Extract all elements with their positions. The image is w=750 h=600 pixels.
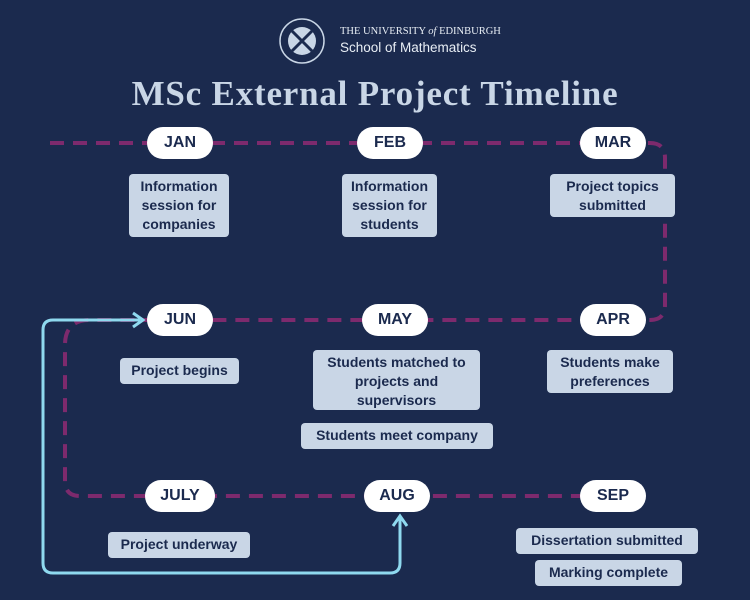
pill: FEB: FEB bbox=[374, 134, 406, 151]
box: MAY meet: Students meet company bbox=[316, 427, 478, 443]
box: MAY: projects and bbox=[355, 373, 438, 389]
pill: SEP bbox=[580, 480, 646, 512]
box: SEP dissertation: Dissertation submitted bbox=[531, 532, 683, 548]
box: SEP marking: Marking complete bbox=[549, 564, 668, 580]
pill: APR: APR bbox=[596, 311, 630, 328]
logo: THE UNIVERSITY of EDINBURGH bbox=[340, 26, 501, 37]
logo: School of Mathematics bbox=[340, 40, 477, 55]
pill: JAN bbox=[147, 127, 213, 159]
box: MAY bbox=[313, 350, 480, 410]
pill: JULY bbox=[145, 480, 215, 512]
pill: MAR bbox=[580, 127, 646, 159]
box: JUN bbox=[120, 358, 239, 384]
box: MAR: Project topics bbox=[566, 178, 659, 194]
logo bbox=[279, 18, 501, 64]
box: JAN: Information bbox=[140, 178, 218, 194]
box: JAN: companies bbox=[142, 216, 216, 232]
pill: JULY: JULY bbox=[160, 487, 200, 504]
pill: JAN: JAN bbox=[164, 134, 196, 151]
pill: FEB bbox=[357, 127, 423, 159]
pill: MAY bbox=[362, 304, 428, 336]
pill: MAR: MAR bbox=[595, 134, 631, 151]
pill: AUG bbox=[364, 480, 430, 512]
box: APR bbox=[547, 350, 673, 393]
box: SEP dissertation bbox=[516, 528, 698, 554]
arrow: cyan loop bbox=[43, 313, 407, 573]
box: JUN: Project begins bbox=[131, 362, 228, 378]
pill: AUG: AUG bbox=[379, 487, 415, 504]
box: MAY meet bbox=[301, 423, 493, 449]
box: MAY: Students matched to bbox=[327, 354, 466, 370]
box: APR: preferences bbox=[570, 373, 650, 389]
pill: JUN: JUN bbox=[164, 311, 196, 328]
box: FEB: Information bbox=[351, 178, 428, 194]
pill: MAY: MAY bbox=[378, 311, 412, 328]
box: FEB: students bbox=[360, 216, 419, 232]
box: MAR: submitted bbox=[579, 197, 646, 213]
box: MAR bbox=[550, 174, 675, 217]
box: FEB: session for bbox=[352, 197, 427, 213]
box: JAN bbox=[129, 174, 229, 237]
pill: JUN bbox=[147, 304, 213, 336]
box: MAY: supervisors bbox=[357, 392, 436, 408]
pill: SEP: SEP bbox=[597, 487, 629, 504]
box: FEB bbox=[342, 174, 437, 237]
box: APR: Students make bbox=[560, 354, 660, 370]
box: SEP marking bbox=[535, 560, 682, 586]
box: JULY bbox=[108, 532, 250, 558]
title: MSc External Project Timeline bbox=[132, 74, 618, 113]
pill: APR bbox=[580, 304, 646, 336]
box: JULY: Project underway bbox=[121, 536, 237, 552]
box: JAN: session for bbox=[142, 197, 216, 213]
